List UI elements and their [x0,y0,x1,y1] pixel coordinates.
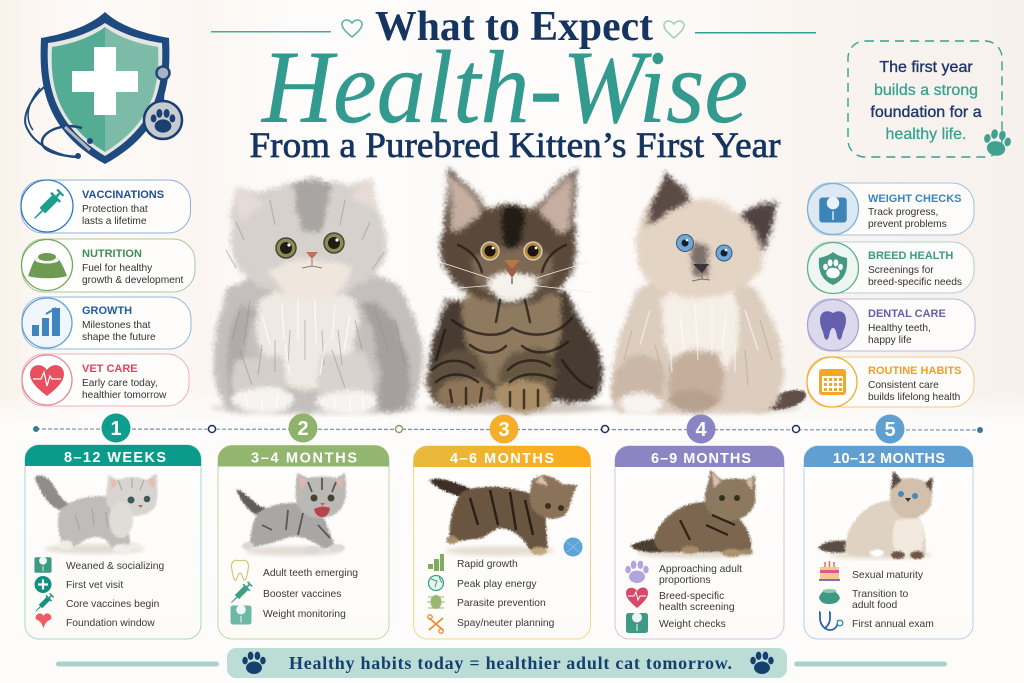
footer banner [56,648,947,678]
pill: dental care: Healthy teeth, [868,323,931,334]
checklist: Rapid growth [457,559,518,570]
step marker 4: 4 [695,419,707,441]
pill: routine habits: ROUTINE HABITS [868,365,962,377]
panel: 6-9 months [615,446,784,639]
checklist [819,561,934,630]
pill: breed health: BREED HEALTH [868,250,953,262]
panel: 4-6 months [414,446,590,639]
pill: vaccinations: lasts a lifetime [82,216,147,227]
step marker 5 [876,414,904,444]
callout: first year: builds a strong [874,82,978,99]
checklist [33,557,165,629]
kitten illustration [37,473,157,554]
panel: right care pills [807,183,975,407]
cat: brown tabby maine coon kitten [425,167,605,414]
pill: growth: shape the future [82,332,156,343]
pill: weight checks: WEIGHT CHECKS [868,193,962,205]
checklist: Parasite prevention [457,598,546,609]
pill: nutrition: Fuel for healthy [82,263,153,274]
pill: routine habits [807,357,974,407]
pill: vet care: VET CARE [82,363,138,375]
checklist: Booster vaccines [263,589,341,600]
checklist: Approaching adult [659,564,742,575]
checklist: Breed-specific [659,591,724,602]
checklist: Weight monitoring [263,609,346,620]
title line: From a Purebred Kitten's First Year: From a Purebred Kitten’s First Year [250,125,781,165]
callout: first year: healthy life. [886,126,966,143]
eyes and nose [436,242,590,292]
pill: weight checks [808,183,974,235]
title [250,4,781,165]
checklist: proportions [659,575,711,586]
icon: heart right [664,21,684,38]
pill: nutrition [22,239,195,292]
title line: Health-Wise: Health-Wise [260,30,748,145]
panel: 3-4 months: 3–4 MONTHS [251,450,357,466]
eyes and nose [276,233,344,268]
pill: vet care [22,354,189,406]
checklist: Sexual maturity [852,570,924,581]
callout: first year: The first year [879,59,973,76]
checklist: Core vaccines begin [66,599,160,610]
checklist [625,561,742,633]
checklist: health screening [659,602,735,613]
pill: dental care: happy life [868,335,912,346]
pill: growth: GROWTH [82,305,132,317]
step marker 4 [686,414,716,444]
checklist: Peak play energy [457,579,537,590]
checklist: Weight checks [659,619,726,630]
checklist: Spay/neuter planning [457,618,555,629]
cat: ragdoll colourpoint kitten [600,172,806,414]
panel: 10-12 months: 10–12 MONTHS [833,451,945,467]
step marker 1: 1 [110,418,122,440]
pill: weight checks: Track progress, [868,207,938,218]
kitten illustration [239,473,346,556]
pill: vet care: healthier tomorrow [82,390,167,401]
cat: grey persian kitten [210,177,423,415]
panel: 6-9 months: 6–9 MONTHS [651,451,751,467]
checklist [228,560,358,624]
checklist: Foundation window [66,618,155,629]
pill: growth: Milestones that [82,320,151,331]
checklist: adult food [852,600,898,611]
step marker 2: 2 [297,418,309,440]
pill: growth [22,297,191,349]
step marker 3: 3 [498,419,510,441]
footer banner: Healthy habits today = healthier adult cat tomorrow. [289,653,732,673]
pill: breed health: Screenings for [868,265,934,276]
pill: routine habits: builds lifelong health [868,392,960,403]
pill: weight checks: prevent problems [868,219,947,230]
step marker 1 [102,414,130,442]
pill: vaccinations: Protection that [82,204,148,215]
checklist [427,554,555,633]
pill: routine habits: Consistent care [868,380,939,391]
panel: left care pills [21,180,195,406]
pill: breed health: breed-specific needs [868,277,962,288]
kitten illustration [432,475,582,556]
panel: 4-6 months: 4–6 MONTHS [450,451,554,467]
pill: nutrition: growth & development [82,275,184,286]
pill: nutrition: NUTRITION [82,248,142,260]
checklist: Weaned & socializing [66,561,165,572]
pill: vaccinations [21,180,190,233]
shield logo with stethoscope [25,12,182,164]
pill: vet care: Early care today, [82,378,158,389]
panel: 8-12 weeks [25,445,201,639]
icon: heart left [342,20,362,37]
checklist: Adult teeth emerging [263,568,358,579]
pill: vaccinations: VACCINATIONS [82,189,164,201]
kitten illustration [630,470,755,558]
checklist: First vet visit [66,580,123,591]
eyes and nose [676,234,732,281]
panel: 3-4 months [218,446,389,639]
step marker 3 [490,414,518,444]
timeline [33,414,983,444]
pill: dental care: DENTAL CARE [868,308,946,320]
pill: breed health [808,242,974,294]
callout: first year: foundation for a [870,104,982,121]
step marker 5: 5 [884,419,896,441]
pill: dental care [808,299,975,351]
checklist: First annual exam [852,619,934,630]
checklist: Transition to [852,589,909,600]
title line: What to Expect: What to Expect [375,4,653,50]
step marker 2 [288,414,318,442]
kitten illustration [818,470,933,559]
panel: 8-12 weeks: 8–12 WEEKS [64,450,166,466]
panel: 10-12 months [804,446,973,639]
callout: first year [848,41,1013,158]
